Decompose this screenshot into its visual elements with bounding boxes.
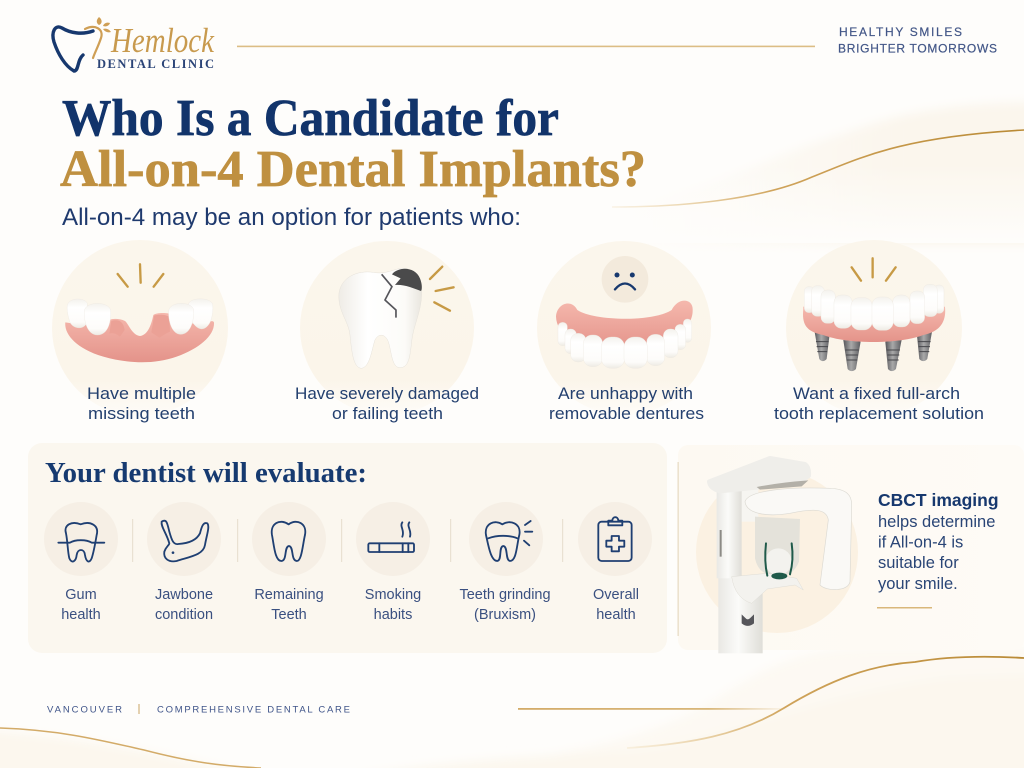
logo subline: DENTAL CLINIC xyxy=(97,57,214,71)
label: missing teeth xyxy=(88,404,195,423)
label: removable dentures xyxy=(549,404,704,423)
label: tooth replacement solution xyxy=(774,404,984,423)
item: jawbone condition xyxy=(147,502,221,623)
label xyxy=(295,384,479,423)
illustration: CBCT machine xyxy=(709,458,852,653)
tagline: BRIGHTER TOMORROWS xyxy=(838,42,997,56)
logo xyxy=(53,17,215,71)
item: jawbone condition: condition xyxy=(155,607,213,623)
label: or failing teeth xyxy=(332,404,443,423)
panel: missing teeth xyxy=(52,240,228,423)
item: remaining teeth: Remaining xyxy=(254,587,324,603)
panel: your dentist will evaluate xyxy=(28,443,667,653)
panel: CBCT imaging xyxy=(678,445,1024,653)
illustration: sad denture xyxy=(556,256,693,368)
item: smoking habits xyxy=(356,502,430,623)
item: teeth grinding xyxy=(459,502,551,623)
heading: Your dentist will evaluate: xyxy=(45,458,367,489)
item: gum health: Gum xyxy=(65,587,97,603)
item: jawbone condition: Jawbone xyxy=(155,587,213,603)
caption: if All-on-4 is xyxy=(878,534,963,552)
item: gum health xyxy=(44,502,118,623)
label: Have multiple xyxy=(87,384,196,403)
tagline: HEALTHY SMILES xyxy=(839,25,962,39)
illustration: full-arch implant bridge xyxy=(803,258,945,371)
item: smoking habits: Smoking xyxy=(365,587,421,603)
caption: CBCT imaging xyxy=(878,490,999,510)
item: overall health: Overall xyxy=(593,587,639,603)
item: overall health: health xyxy=(596,607,636,623)
label xyxy=(87,384,196,423)
subtitle: All-on-4 may be an option for patients who: xyxy=(62,204,521,231)
title: All-on-4 Dental Implants? xyxy=(60,141,646,198)
footer: VANCOUVER xyxy=(47,704,122,716)
item: teeth grinding: (Bruxism) xyxy=(474,607,536,623)
logo wordmark: Hemlock xyxy=(110,21,215,60)
title xyxy=(60,90,646,198)
tagline xyxy=(838,25,997,56)
label xyxy=(549,384,704,423)
title: Who Is a Candidate for xyxy=(62,90,559,147)
label: Are unhappy with xyxy=(558,384,693,403)
caption: suitable for xyxy=(878,554,959,572)
item: remaining teeth xyxy=(252,502,326,623)
item: smoking habits: habits xyxy=(374,607,412,623)
illustration: gum with missing teeth xyxy=(65,264,214,362)
item: remaining teeth: Teeth xyxy=(271,607,307,623)
label: Want a fixed full-arch xyxy=(793,384,960,403)
item: teeth grinding: Teeth grinding xyxy=(459,587,551,603)
item: overall health xyxy=(578,502,652,623)
footer: COMPREHENSIVE DENTAL CARE xyxy=(157,704,350,716)
item: gum health: health xyxy=(61,607,101,623)
caption: helps determine xyxy=(878,513,995,531)
illustration: cracked tooth xyxy=(339,267,454,368)
footer xyxy=(47,704,350,716)
panel: damaged tooth xyxy=(295,241,479,423)
icon: tooth logo xyxy=(53,17,111,71)
panel: removable dentures xyxy=(537,241,711,423)
label xyxy=(774,384,984,423)
caption: your smile. xyxy=(878,575,958,593)
label: Have severely damaged xyxy=(295,384,479,403)
panel: fixed full-arch xyxy=(774,240,984,423)
